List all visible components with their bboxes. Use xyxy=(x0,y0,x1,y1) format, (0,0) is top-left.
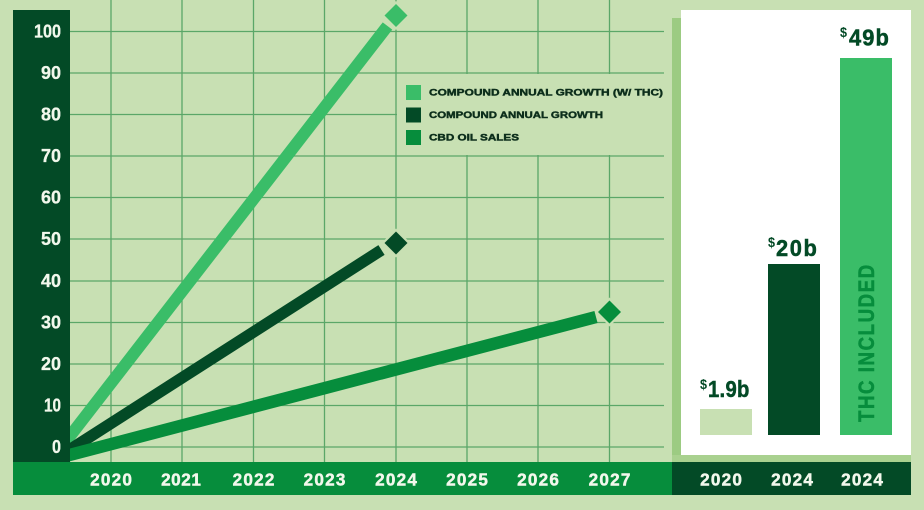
x axis: bar chart xyxy=(672,462,911,495)
line: compound annual growth xyxy=(60,228,410,456)
legend item: CBD oil sales xyxy=(406,130,519,145)
y axis xyxy=(13,10,70,462)
y axis: 70 xyxy=(41,146,61,166)
bar: 2020 xyxy=(700,376,752,435)
bar: 2024: 20b xyxy=(776,235,817,261)
y axis: 40 xyxy=(41,271,61,291)
bar: 2020: 1.9b xyxy=(708,376,749,402)
y axis: 30 xyxy=(41,312,61,332)
legend item: compound annual growth xyxy=(406,108,603,122)
x axis: bar chart: 2024 xyxy=(841,469,883,490)
x axis: 2022 xyxy=(233,469,275,490)
x axis xyxy=(13,462,673,495)
bar: 2024 xyxy=(768,234,820,435)
x axis: 2027 xyxy=(589,469,630,490)
bar: 2024: $ xyxy=(768,234,775,250)
line: compound annual growth with THC xyxy=(60,1,410,449)
bar: 2024 with THC: 49b xyxy=(849,25,889,51)
x axis: 2025 xyxy=(446,469,488,490)
bar: 2024 with THC xyxy=(840,24,892,435)
legend item: compound annual growth with THC: COMPOUND ANNUAL GROWTH (W/ THC) xyxy=(429,88,663,98)
line: CBD oil sales xyxy=(60,298,624,458)
legend xyxy=(397,74,665,155)
y axis: 60 xyxy=(41,188,61,208)
x axis: 2024 xyxy=(375,469,417,490)
legend item: compound annual growth: COMPOUND ANNUAL GROWTH xyxy=(429,110,603,121)
bar: 2020: $ xyxy=(700,376,707,392)
y axis: 90 xyxy=(41,63,61,83)
x axis: bar chart: 2020 xyxy=(700,469,742,490)
bar: 2024 with THC: $ xyxy=(840,24,847,40)
legend item: compound annual growth with THC xyxy=(406,85,663,100)
y axis: 80 xyxy=(41,104,61,124)
panel: bar chart xyxy=(672,10,911,462)
bar label: THC included: THC INCLUDED xyxy=(856,265,879,422)
legend item: CBD oil sales: CBD OIL SALES xyxy=(429,132,519,144)
x axis: 2020 xyxy=(90,469,132,490)
y axis: 10 xyxy=(44,396,61,416)
x axis: 2023 xyxy=(304,469,346,490)
y axis: 0 xyxy=(52,437,61,457)
y axis: 50 xyxy=(41,229,61,249)
x axis: bar chart: 2024 xyxy=(771,469,813,490)
x axis: 2026 xyxy=(517,469,559,490)
y axis: 100 xyxy=(34,22,61,42)
x axis: 2021 xyxy=(161,469,201,490)
y axis: 20 xyxy=(41,354,61,374)
